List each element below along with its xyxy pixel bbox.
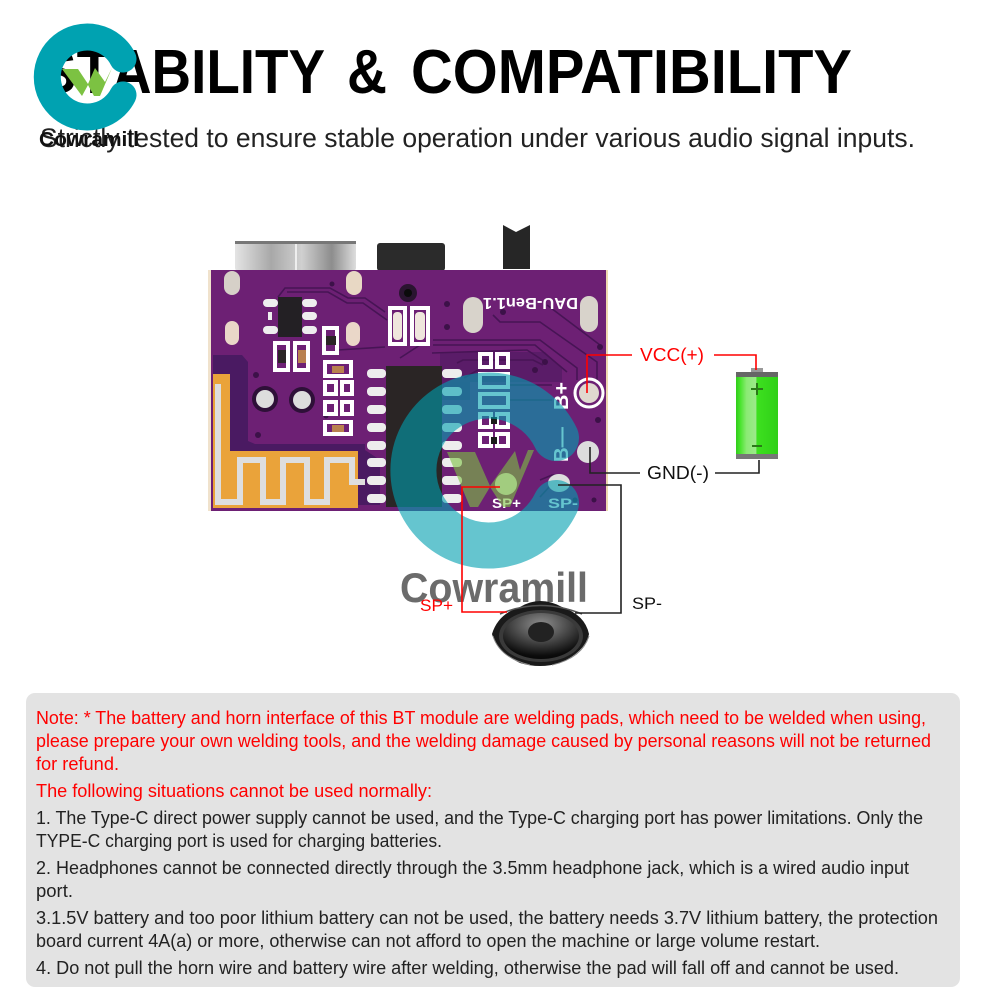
speaker [492,601,589,666]
label: VCC(+): VCC(+) [640,345,704,365]
red warning note: for refund. [36,754,119,774]
main IC [386,366,442,507]
watermark wordmark: Cowramill [400,564,588,611]
numbered list [36,808,938,978]
PCB silkscreen labels: B+ [551,382,573,410]
title: & [347,38,387,107]
circuit board [208,225,608,511]
numbered list: TYPE-C charging port is used for charging batteries. [36,831,442,851]
numbered list: 3.1.5V battery and too poor lithium battery can not be used, the battery needs 3.7V lithium battery, the protection [36,908,938,928]
small brand logo: Cowramill [39,128,139,151]
red warning note: Note: * The battery and horn interface of this BT module are welding pads, which need to be welded when using, [36,708,926,728]
label: GND(-): GND(-) [647,463,709,483]
subtitle: Strictly tested to ensure stable operation under various audio signal inputs. [40,123,915,153]
ground plane [213,355,380,505]
mounting holes and round pads [224,271,603,495]
slide switch [503,225,530,269]
wire: SP- [558,485,621,613]
numbered list: 2. Headphones cannot be connected directly through the 3.5mm headphone jack, which is a wired audio input [36,858,909,878]
white component footprints [275,308,508,446]
numbered list: port. [36,881,73,901]
red warning note: please prepare your own welding tools, and the welding damage caused by personal reasons will not be returned [36,731,931,751]
traces [278,288,600,497]
IC pins [367,369,462,503]
label: SP-: SP- [632,594,662,613]
panel: notes [26,693,960,987]
battery [736,368,778,459]
PCB silkscreen labels: SP- [548,495,578,511]
vias [253,282,603,502]
red warning note [36,708,931,801]
title: ST [38,38,112,107]
PCB silkscreen labels: SP+ [492,495,521,511]
PCB silkscreen labels [483,294,578,511]
small SOT chip [263,297,317,337]
PCB silkscreen labels: DAU-Ben1.1 [483,294,578,311]
title [38,38,852,107]
audio jack [377,243,445,271]
USB Type-C connector [235,241,356,271]
small SMD parts [278,312,497,444]
PCB silkscreen labels: B— [551,427,573,462]
label: SP+: SP+ [420,596,453,615]
wire: SP+ [462,487,507,612]
small brand logo [39,37,139,151]
watermark logo [413,396,556,546]
PCB body [210,270,608,511]
numbered list: board current 4A(a) or more, otherwise can not afford to open the machine or large volume restart. [36,931,820,951]
wire: VCC [587,355,756,393]
gold antenna [213,374,365,508]
title: COMPATIBILITY [411,38,852,107]
title: ABILITY [112,38,325,107]
wire: GND [590,447,759,473]
numbered list: 4. Do not pull the horn wire and battery wire after welding, otherwise the pad will fall off and cannot be used. [36,958,899,978]
red warning note: The following situations cannot be used normally: [36,781,432,801]
numbered list: 1. The Type-C direct power supply cannot be used, and the Type-C charging port has power limitations. Only the [36,808,923,828]
